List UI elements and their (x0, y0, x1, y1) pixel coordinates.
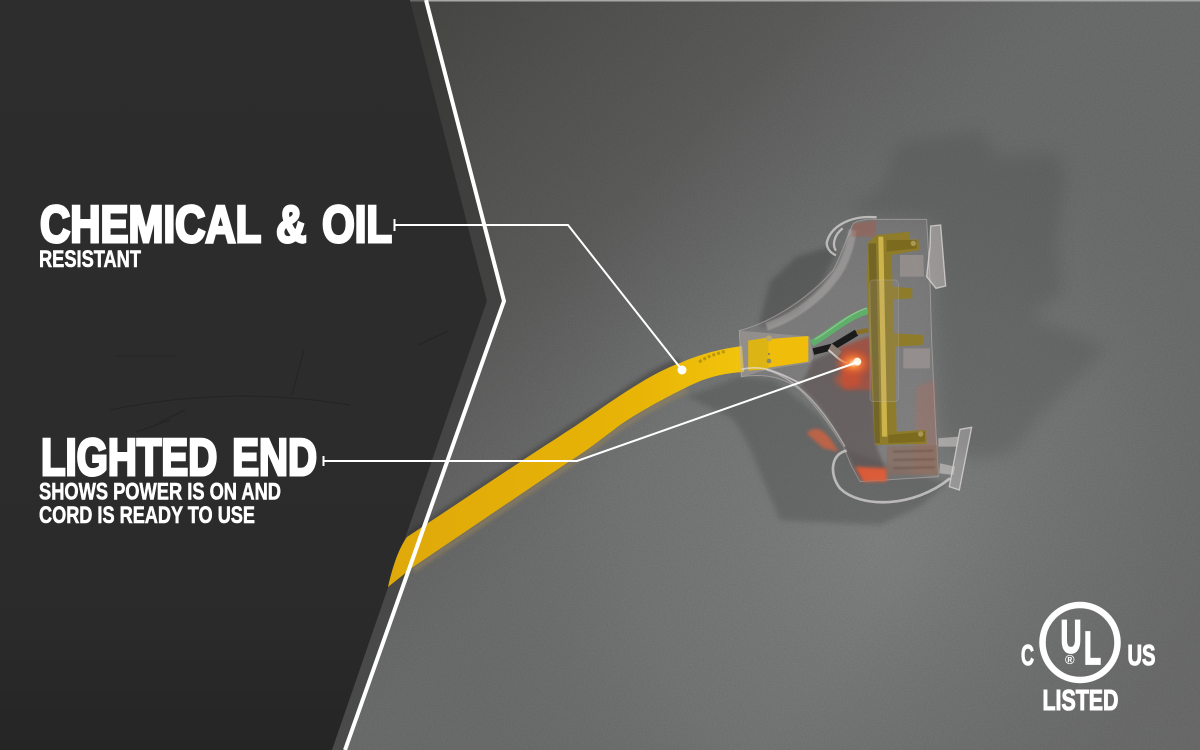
bottom loop (833, 451, 950, 502)
top loop (827, 217, 877, 255)
red glow inside housing (840, 337, 872, 390)
description: lighted end: SHOWS POWER IS ON AND (39, 478, 281, 506)
UL letters: U (1060, 610, 1082, 662)
heading: chemical and oil: CHEMICAL & OIL (40, 196, 392, 254)
UL listed badge: L (1084, 622, 1101, 674)
panel: translucent band (330, 0, 505, 750)
clear housing (739, 219, 938, 482)
cast shadows of the connector (687, 130, 1107, 525)
leader line: chemical and oil (394, 219, 682, 370)
UL listed badge (1021, 605, 1156, 717)
black wire (813, 333, 857, 352)
leader line: lighted end (324, 362, 858, 466)
description: lighted end: CORD IS READY TO USE (39, 502, 255, 529)
UL ring (1042, 605, 1118, 680)
dark panel (0, 0, 505, 750)
green wire (812, 311, 868, 343)
us mark: US (1128, 640, 1156, 672)
strain relief and yellow insert (739, 331, 813, 377)
plug blades right side (927, 225, 946, 288)
led glow (833, 347, 873, 379)
lighted connector (739, 217, 972, 502)
leader dot (678, 366, 686, 374)
subheading: resistant: RESISTANT (39, 246, 141, 273)
top swoop highlight (767, 230, 853, 327)
white chevron line (345, 0, 504, 750)
registered mark: ® (1065, 652, 1075, 667)
c mark: C (1021, 640, 1034, 672)
listed label: LISTED (1042, 685, 1118, 717)
description: lighted end (39, 478, 281, 529)
callout: lighted end (39, 362, 858, 529)
brass bus bar (867, 232, 927, 445)
heading: lighted end: LIGHTED END (41, 429, 317, 487)
dark reddish interior (800, 337, 887, 480)
yellow cord (388, 346, 744, 587)
callout: chemical and oil (39, 196, 686, 374)
